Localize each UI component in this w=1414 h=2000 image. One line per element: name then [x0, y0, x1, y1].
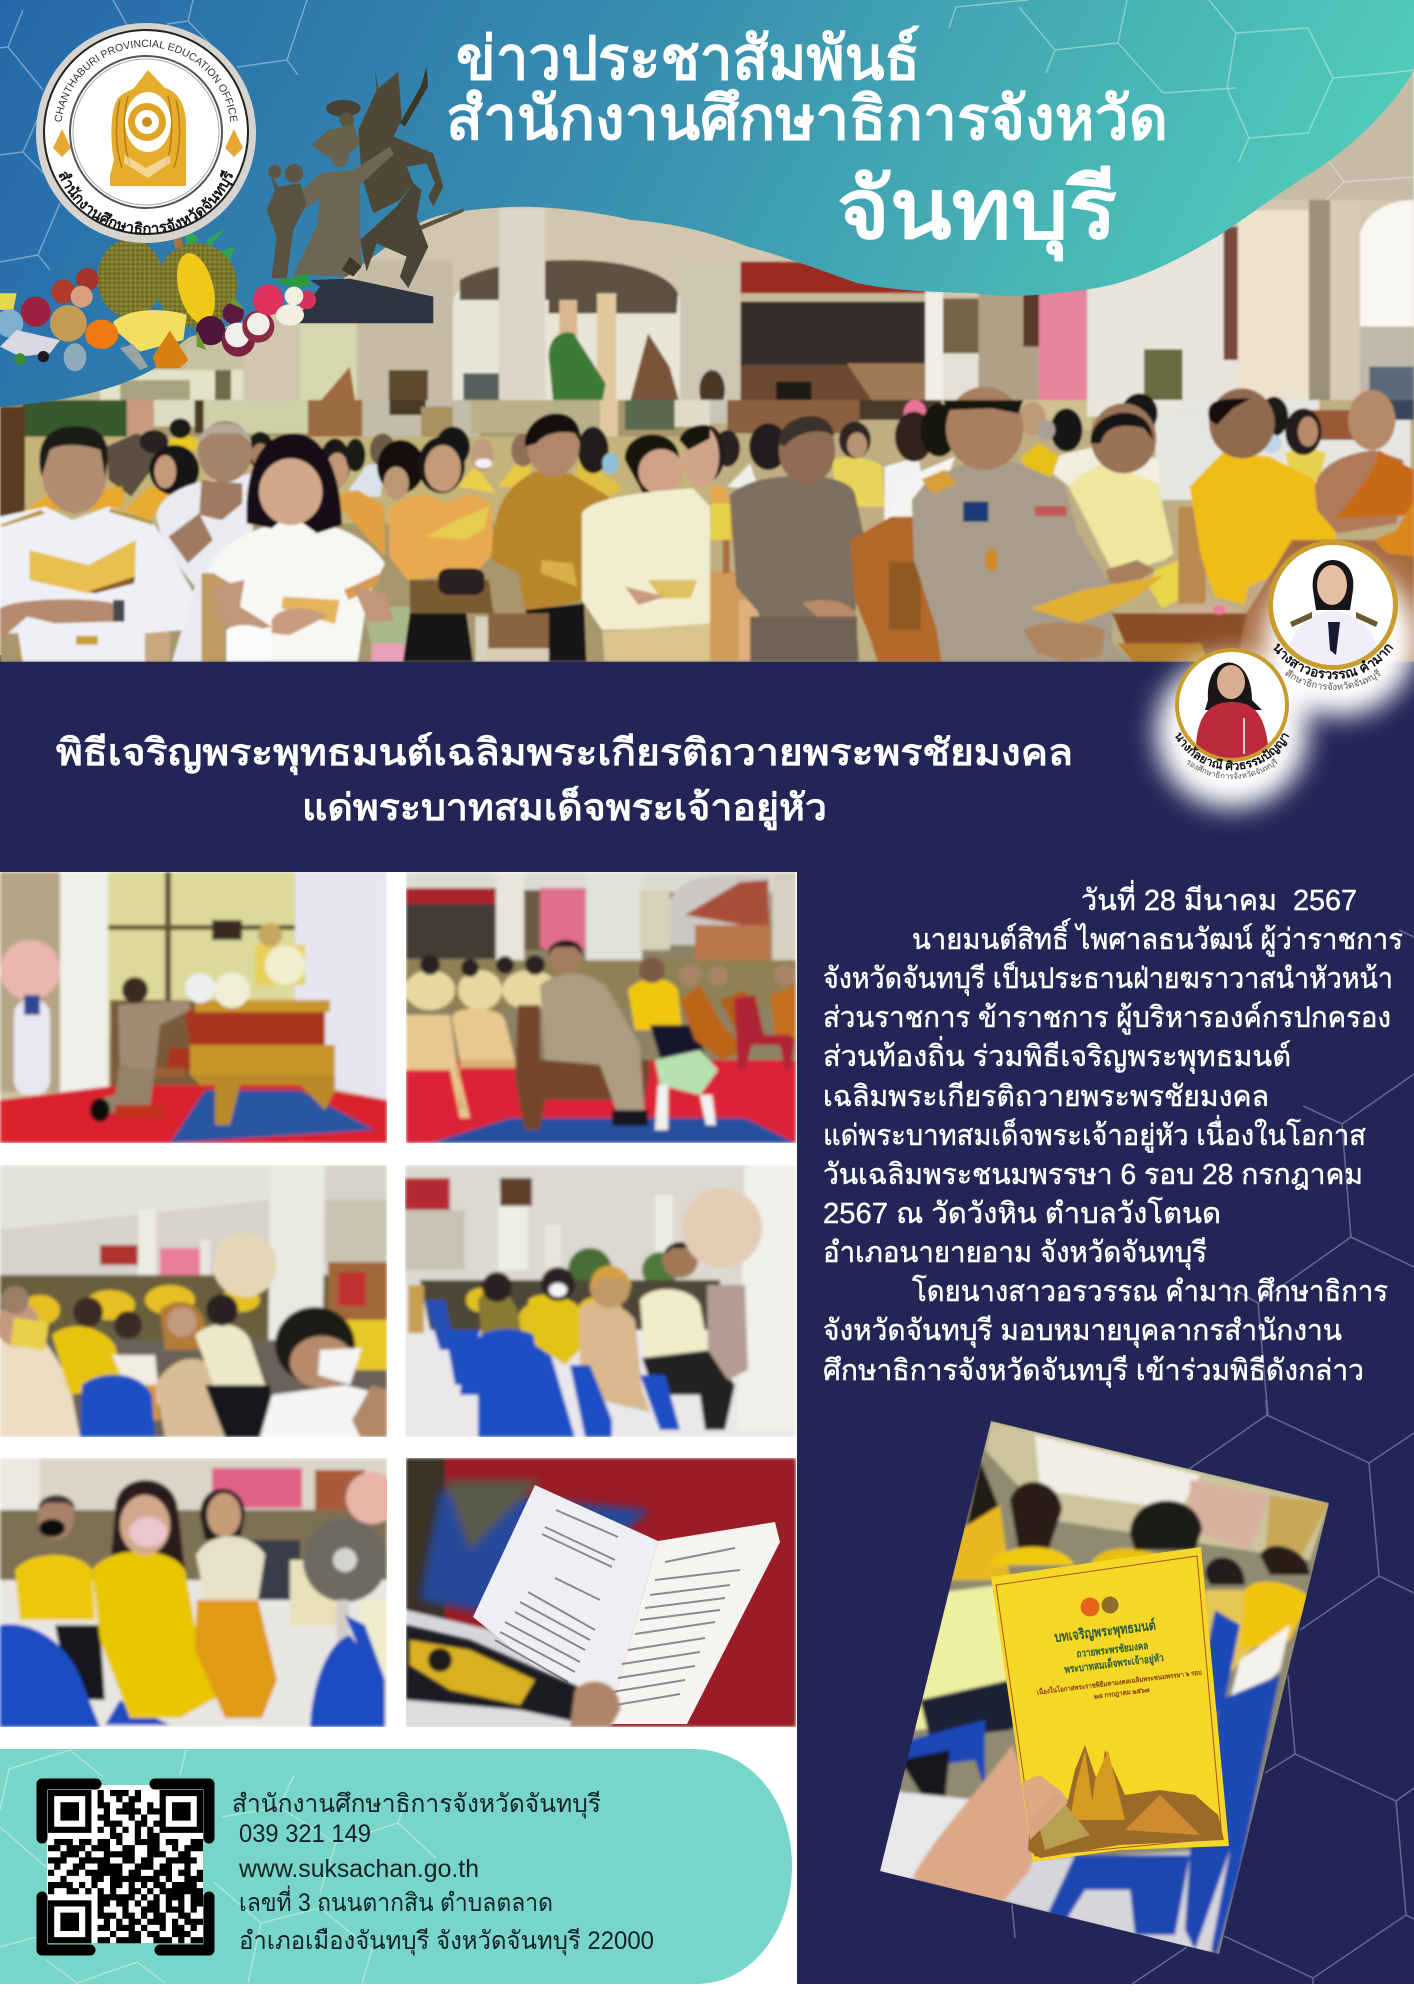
- statue of King Taksin on horseback on plinth: [267, 67, 464, 323]
- main group photo: officials and attendees seated in the temple hall: [0, 70, 1414, 662]
- article body text: ส่วนราชการ ข้าราชการ ผู้บริหารองค์กรปกครอง: [823, 1001, 1391, 1035]
- gold ministry emblem with dharma wheel: [110, 70, 186, 186]
- photo: women in yellow and orange dress smiling on blue chairs: [0, 1458, 387, 1727]
- article body text: จังหวัดจันทบุรี มอบหมายบุคลากรสำนักงาน: [823, 1315, 1342, 1348]
- ceremony title: [56, 732, 1073, 831]
- banner headline: จันทบุรี: [837, 164, 1117, 262]
- ceremony title: แด่พระบาทสมเด็จพระเจ้าอยู่หัว: [302, 784, 827, 831]
- article body text: 2567 ณ วัดวังหิน ตำบลวังโตนด: [823, 1196, 1221, 1230]
- teal gradient header banner shape: [0, 0, 1414, 407]
- book title text: [1030, 1612, 1204, 1708]
- contact panel background: [0, 1749, 792, 1984]
- book title text: เนื่องในโอกาสพระราชพิธีมหามงคลเฉลิมพระชนมพรรษา ๖ รอบ: [1036, 1666, 1203, 1697]
- navy background panel: [0, 655, 1414, 1984]
- portrait: provincial education director: [1268, 540, 1398, 690]
- QR code with corner brackets: [42, 1784, 209, 1950]
- banner headline: สำนักงานศึกษาธิการจังหวัด: [446, 86, 1168, 152]
- contact details: 039 321 149: [239, 1820, 371, 1848]
- book title text: พระบาทสมเด็จพระเจ้าอยู่หัว: [1063, 1650, 1165, 1677]
- article body text: วันที่ 28 มีนาคม 2567: [1081, 880, 1357, 917]
- book title text: บทเจริญพระพุทธมนต์: [1053, 1617, 1157, 1646]
- hexagon line pattern on banner: [0, 0, 1414, 270]
- book emblems: [1080, 1596, 1118, 1616]
- white glow behind portraits: [1156, 564, 1414, 808]
- rotated photo: hand holding yellow chanting book in crowd: [870, 1415, 1340, 1960]
- ceremony title: พิธีเจริญพระพุทธมนต์เฉลิมพระเกียรติถวายพระพรชัยมงคล: [56, 732, 1073, 776]
- article body text: วันเฉลิมพระชนมพรรษา 6 รอบ 28 กรกฎาคม: [823, 1159, 1363, 1191]
- portrait: deputy provincial education director: [1175, 648, 1290, 780]
- seal English lettering: CHANTHABURI PROVINCIAL EDUCATION OFFICE: [54, 40, 238, 122]
- article body text: แด่พระบาทสมเด็จพระเจ้าอยู่หัว เนื่องในโอกาส: [823, 1115, 1366, 1153]
- contact details: อำเภอเมืองจันทบุรี จังหวัดจันทบุรี 22000: [239, 1927, 654, 1956]
- seal Thai lettering: สำนักงานศึกษาธิการจังหวัดจันทบุรี: [58, 170, 234, 234]
- photo: attendees on blue chairs beside flower arrangement, right view: [405, 1165, 796, 1437]
- photo: governor seated in carved wooden chair with officials and monks: [406, 872, 796, 1143]
- director name: นางสาวอรวรรณ คำมาก: [1273, 644, 1394, 680]
- photo: man kneeling at golden altar on red carpet: [0, 872, 387, 1143]
- book title text: ถวายพระพรชัยมงคล: [1076, 1640, 1149, 1660]
- yellow book cover: [991, 1547, 1229, 1862]
- director title: ศึกษาธิการจังหวัดจันทบุรี: [1285, 668, 1380, 690]
- banner headline: [446, 25, 1168, 262]
- fruits and gems of Chanthaburi: [0, 217, 316, 371]
- contact details: สำนักงานศึกษาธิการจังหวัดจันทบุรี: [232, 1790, 601, 1819]
- circular seal of Chanthaburi Provincial Education Office: [36, 23, 256, 243]
- article body text: เฉลิมพระเกียรติถวายพระพรชัยมงคล: [823, 1081, 1269, 1113]
- article body text: โดยนางสาวอรวรรณ คำมาก ศึกษาธิการ: [912, 1274, 1388, 1308]
- hexagon lines on contact panel: [0, 1750, 436, 1983]
- photo: open chanting book held against red background: [406, 1458, 796, 1727]
- photo: attendees in yellow seated on blue chairs, left view: [0, 1165, 387, 1437]
- contact details: [232, 1790, 654, 1956]
- hexagon line pattern on navy panel: [1012, 930, 1414, 1984]
- deputy title: รองศึกษาธิการจังหวัดจันทบุรี: [1188, 758, 1278, 780]
- article body text: [823, 880, 1403, 1388]
- banner headline: ข่าวประชาสัมพันธ์: [456, 25, 920, 92]
- article body text: ศึกษาธิการจังหวัดจันทบุรี เข้าร่วมพิธีดังกล่าว: [823, 1355, 1364, 1388]
- seal side diamonds: [53, 129, 243, 157]
- hexagon lines over the right of the photo: [1308, 133, 1414, 200]
- contact details: www.suksachan.go.th: [238, 1855, 479, 1883]
- article body text: ส่วนท้องถิ่น ร่วมพิธีเจริญพระพุทธมนต์: [823, 1036, 1291, 1074]
- contact details: เลขที่ 3 ถนนตากสิน ตำบลตลาด: [239, 1885, 553, 1917]
- book title text: ๒๘ กรกฎาคม ๒๕๖๗: [1094, 1687, 1150, 1701]
- article body text: อำเภอนายายอาม จังหวัดจันทบุรี: [823, 1237, 1207, 1270]
- deputy name: นางกัลยาณี ศิวธรรมปัญญา: [1175, 732, 1290, 770]
